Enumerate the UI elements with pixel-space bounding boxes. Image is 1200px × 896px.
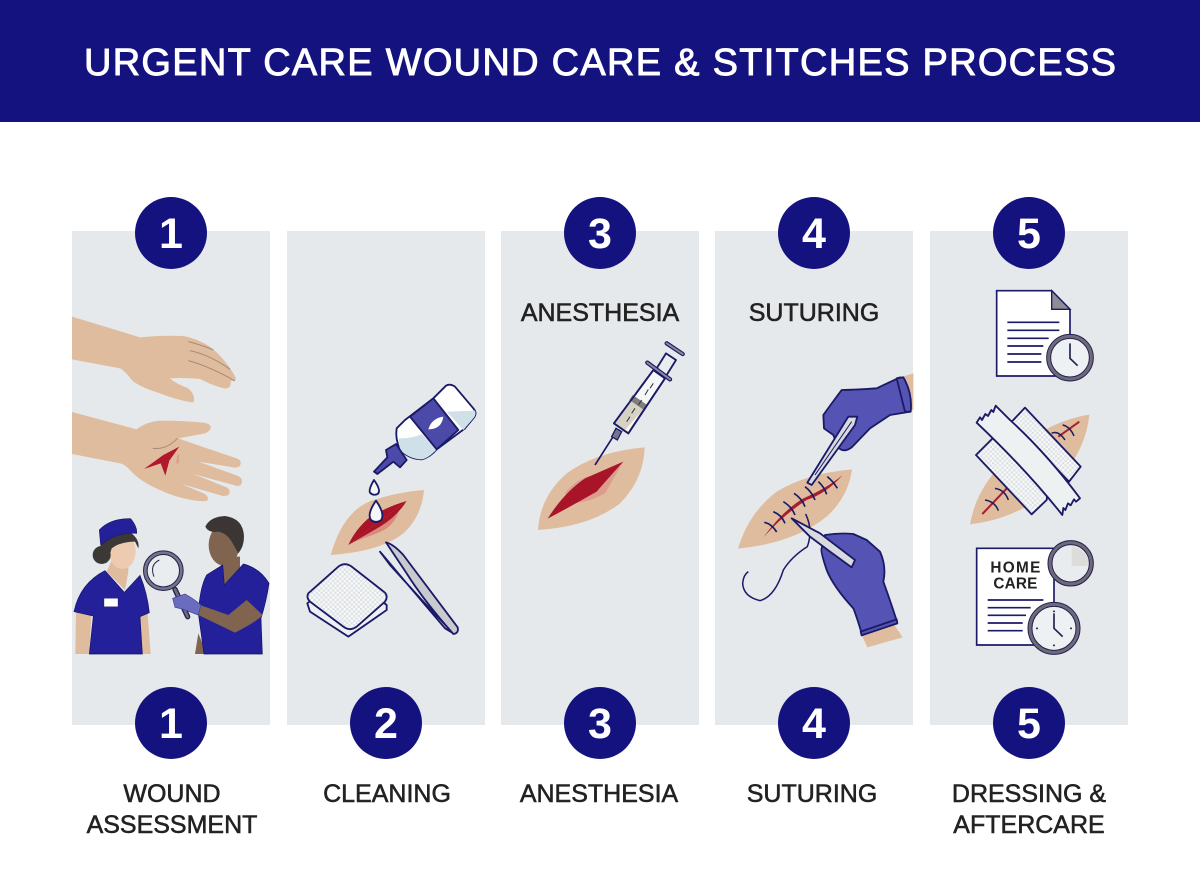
syringe: [595, 343, 683, 465]
title banner: URGENT CARE WOUND CARE & STITCHES PROCESS: [84, 42, 1116, 84]
nurse: [74, 519, 151, 654]
step 1 top badge: [135, 197, 207, 269]
upper gloved hand: [823, 373, 913, 450]
panel: suturing: [715, 197, 913, 808]
label: wound assessment: ASSESSMENT: [87, 811, 257, 839]
step 5 top badge: 5: [1017, 210, 1041, 258]
saline drops: [370, 480, 382, 522]
label: dressing and aftercare: AFTERCARE: [953, 811, 1105, 839]
bandage tape: [977, 406, 1080, 515]
panel: dressing and aftercare: [930, 197, 1128, 839]
lower forceps: [792, 518, 855, 567]
step 4 top badge: 4: [802, 210, 826, 258]
illustration: suturing: [738, 373, 913, 647]
lower hand with cut: [72, 412, 242, 501]
clinician arm and glove: [173, 594, 263, 633]
lower gloved hand: [821, 534, 903, 647]
wound: [331, 490, 424, 555]
illustration: hands and clinicians: [72, 317, 269, 654]
wound under dressing: [970, 415, 1089, 524]
step 2 badge: 2: [374, 700, 398, 748]
step 4 bottom badge: 4: [802, 700, 826, 748]
illustration: cleaning supplies: [307, 385, 476, 637]
step 4 top badge: [778, 197, 850, 269]
home care sheet: HOME: [990, 559, 1040, 576]
gauze pads: [307, 564, 387, 637]
heading: anesthesia: ANESTHESIA: [521, 299, 680, 327]
step 4 bottom badge: [778, 687, 850, 759]
step 1 bottom badge: [135, 687, 207, 759]
gauze strip: [976, 408, 1081, 514]
step 3 bottom badge: [564, 687, 636, 759]
panel: cleaning: [287, 231, 485, 808]
tweezers: [380, 542, 458, 634]
upper hand: [72, 317, 236, 403]
label: cleaning: CLEANING: [323, 780, 451, 808]
heading: suturing: SUTURING: [749, 299, 879, 327]
document with clock: [997, 291, 1093, 381]
step 5 bottom badge: [993, 687, 1065, 759]
step 3 top badge: [564, 197, 636, 269]
step 3 top badge: 3: [588, 210, 612, 258]
panel: wound assessment: [72, 197, 270, 839]
label: dressing and aftercare: DRESSING &: [952, 780, 1106, 808]
step 5 bottom badge: 5: [1017, 700, 1041, 748]
home care sheet: [977, 548, 1054, 645]
step 3 bottom badge: 3: [588, 700, 612, 748]
step 5 top badge: [993, 197, 1065, 269]
wound: [538, 447, 645, 530]
label: wound assessment: WOUND: [123, 780, 221, 808]
panel: anesthesia: [501, 197, 699, 808]
upper ring: [1048, 541, 1093, 586]
step 1 bottom badge: 1: [159, 700, 183, 748]
wound with stitches: [738, 469, 852, 549]
step 2 badge: [350, 687, 422, 759]
title banner: [0, 0, 1200, 122]
suture thread: [743, 514, 810, 601]
label: suturing: SUTURING: [747, 780, 877, 808]
saline bottle: [374, 385, 476, 474]
clinician: [195, 516, 269, 654]
home care sheet: CARE: [993, 575, 1037, 592]
label: anesthesia: ANESTHESIA: [520, 780, 679, 808]
step 1 top badge: 1: [159, 210, 183, 258]
magnifying glass: [145, 553, 188, 617]
upper forceps: [807, 417, 857, 485]
illustration: aftercare: [970, 291, 1093, 654]
lower clock: [1028, 602, 1080, 654]
